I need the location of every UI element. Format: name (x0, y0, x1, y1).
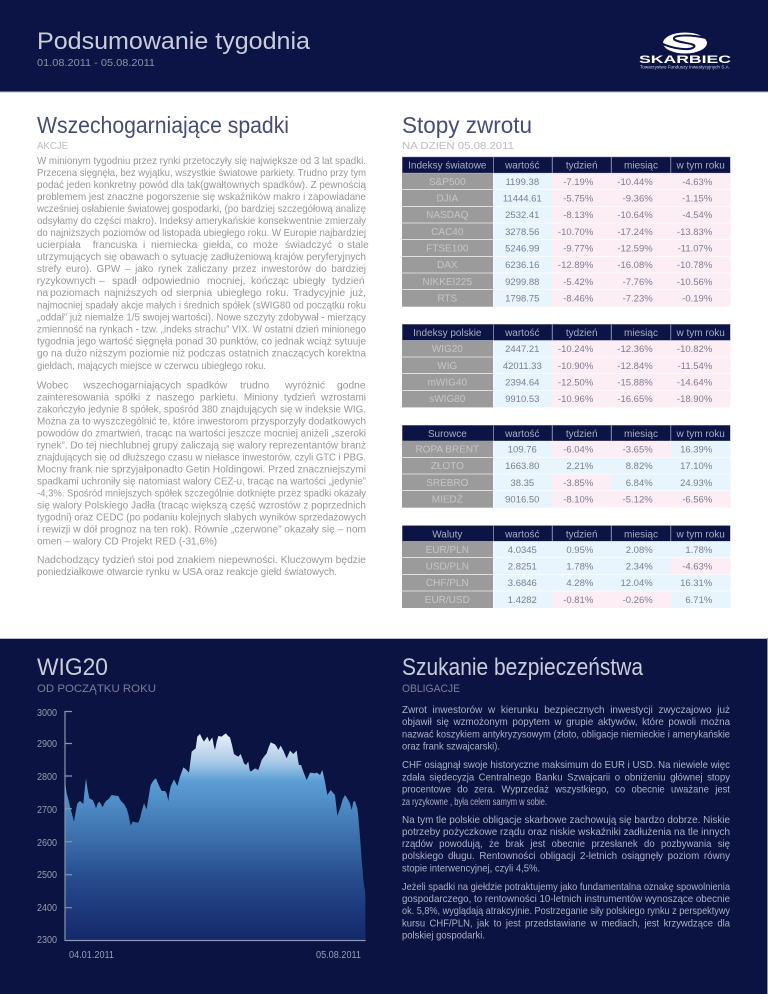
table: surowce: -6.56% (682, 494, 713, 506)
heading: Szukanie bezpieczeństwa: Szukanie bezpieczeństwa (402, 654, 644, 681)
text block: paragraph 1: Przecena sięgnęła, bez wyjątku, wszystkie światowe parkiety. Trudno przy tym (37, 168, 366, 179)
text block: paragraph 2: omen – walory CD Projekt RED (-31,6%) (37, 536, 217, 547)
table: waluty: -0.26% (623, 595, 653, 606)
table: indeksy polskie: mWIG40 (428, 378, 467, 388)
text block: paragraph 2: i rewizji w dół prognoz na ten rok). Równie „czerwone” okazały się – nom (37, 524, 366, 535)
table: indeksy światowe: 11444.61 (503, 194, 542, 204)
table: waluty: 1.78% (685, 545, 713, 556)
x-axis labels: 05.08.2011 (316, 950, 361, 961)
text block: paragraph 2: się walory Polskiego Jadła (tracąc większą część wzrostów z poprzednich (37, 500, 366, 511)
table: waluty: EUR/PLN (426, 545, 469, 556)
text block: paragraph 1: W minionym tygodniu przez rynki przetoczyły się największe od 3 lat spadki. (37, 156, 366, 167)
text block: paragraph 2: zakończyło jedynie 8 spółek, spośród 380 znajdujących się w indeksie WIG. (37, 404, 366, 415)
table: indeksy polskie: -16.65% (617, 394, 653, 405)
text block: paragraph 1: co (237, 240, 248, 251)
table: waluty: Waluty (432, 529, 462, 540)
text block: paragraph 1: spadł (112, 276, 137, 287)
table: waluty: 1.78% (566, 562, 594, 572)
axes (65, 712, 366, 940)
table: indeksy światowe: -7.19% (563, 177, 594, 188)
panel: stopy zwrotu (402, 112, 730, 608)
text block: paragraph 1: sierpnia (176, 288, 212, 299)
text block: paragraph 2: trudno (240, 380, 269, 391)
text block: paragraph 1: od (161, 288, 173, 299)
logo: Skarbiec (639, 32, 731, 70)
table: surowce: 9016.50 (505, 494, 539, 506)
table: surowce: -6.04% (563, 444, 594, 456)
text block: paragraph 3: polskiego długu. Rentowności obligacji 2-letnich osiągnęły poziom równy (402, 851, 731, 862)
text block: paragraph 3 (37, 555, 366, 578)
table: indeksy światowe: -17.24% (617, 227, 653, 238)
table: indeksy światowe: NASDAQ (426, 210, 469, 221)
table: indeksy światowe: -13.83% (677, 227, 713, 238)
table: indeksy światowe (402, 157, 730, 307)
text block: paragraph 1: najniższych (104, 288, 157, 299)
table: indeksy światowe: -7.23% (623, 294, 653, 304)
table: surowce (402, 425, 730, 508)
table: indeksy polskie: 2394.64 (505, 378, 539, 388)
y-axis labels: 3000 (37, 708, 57, 719)
table: indeksy światowe: -10.44% (617, 177, 653, 188)
table: indeksy światowe: wartość (504, 161, 540, 172)
table: indeksy światowe: -4.63% (682, 177, 713, 188)
table: indeksy światowe: -5.42% (563, 277, 594, 288)
area chart (37, 708, 366, 961)
table: waluty: EUR/USD (425, 595, 470, 606)
text block: paragraph 1: kończąc (251, 276, 289, 287)
text block: paragraph 1: – (99, 276, 105, 287)
table: indeksy światowe: RTS (437, 294, 458, 304)
table: indeksy światowe: w tym roku (676, 161, 725, 172)
table: surowce: -8.10% (563, 494, 594, 506)
text block: paragraph 2: CHF osiągnął swoje historyczne maksimum do EUR i USD. Na niewiele więc (402, 760, 730, 771)
table: indeksy światowe: -10.56% (677, 277, 713, 288)
text block: paragraph 1: najmocniej spadały akcje małych i średnich spółek (sWIG80 od początku roku (37, 300, 366, 311)
table: indeksy polskie: -12.50% (558, 378, 594, 388)
table: indeksy światowe: DJIA (436, 194, 458, 204)
table: indeksy polskie: tydzień (566, 328, 598, 339)
text block: paragraph 3 (402, 815, 731, 874)
table: indeksy polskie: -15.88% (617, 378, 653, 388)
text block: paragraph 2: powodów do zmartwień, tracąc na wartości jeszcze mocniej aniżeli „szeroki (37, 428, 366, 439)
text block: paragraph 2: znajdujących się od dłuższego czasu w niełasce inwestorów, czyli GTC i PBG. (37, 452, 366, 463)
y-axis labels: 2400 (37, 903, 57, 914)
text block: paragraph 1: utrzymujących się obawach o sytuację zadłużeniową krajów peryferyjnych (37, 252, 366, 263)
text block: paragraph 4: polskiej gospodarki. (402, 930, 485, 942)
table: indeksy światowe: tydzień (566, 161, 598, 172)
table: surowce: 109.76 (508, 444, 537, 456)
table: indeksy światowe: miesiąc (624, 161, 658, 172)
table: indeksy światowe: -5.75% (563, 194, 594, 204)
text block: paragraph 2: Mocny frank nie sprzyjałponadto Getin Holdingowi. Przed znaczniejszymi (37, 464, 366, 475)
table: waluty: w tym roku (676, 529, 725, 540)
table: indeksy polskie: -10.24% (558, 344, 594, 355)
table: waluty: 6.71% (685, 595, 713, 606)
text block: paragraph 1: odpowiednio (142, 276, 200, 287)
text block: paragraph 1: mocniej, (207, 276, 245, 287)
table: indeksy światowe: DAX (437, 260, 458, 271)
text block: paragraph 1: już, (349, 288, 366, 299)
panel: obligacje article (402, 654, 731, 942)
table: indeksy polskie: -10.96% (558, 394, 594, 405)
table: surowce: wartość (504, 429, 540, 440)
text block: paragraph 1: giełdach, mających miejsce w czerwcu ubiegłego roku. (37, 361, 266, 372)
text block: paragraph 1: poziomach (50, 288, 100, 299)
text block: paragraph 1: podać jeden konkretny powód dla tak(gwałtownych spadków). Z pewnością (37, 180, 366, 191)
date range: 01.08.2011 - 05.08.2011 (37, 57, 155, 69)
text block: paragraph 4 (402, 882, 731, 942)
table: indeksy światowe: -16.08% (617, 260, 653, 271)
text block: paragraph 1: o (338, 240, 344, 251)
text block: paragraph 3: stopie interwencyjnej, czyli 4,5%. (402, 864, 540, 874)
text block: paragraph 1 (402, 705, 730, 752)
table: indeksy światowe: 3278.56 (505, 227, 539, 238)
text block: paragraph 1: i (143, 240, 145, 251)
subheading: obligacje: OBLIGACJE (402, 683, 460, 695)
table: indeksy światowe: -4.54% (682, 210, 713, 221)
table: waluty: 4.0345 (508, 545, 537, 556)
table: surowce: tydzień (566, 429, 598, 440)
table: indeksy światowe: -10.78% (677, 260, 713, 271)
panel: akcje article (36, 112, 369, 578)
table: surowce: -5.12% (623, 494, 653, 506)
y-axis labels: 2300 (37, 935, 57, 946)
table: indeksy światowe: -12.89% (558, 260, 594, 271)
text block: paragraph 1: tydzień (332, 276, 365, 287)
text block: paragraph 1: odsyłamy do części makro). Indeksy amerykańskie konsekwentnie zmierzały (37, 216, 367, 227)
table: indeksy polskie: 42011.33 (503, 361, 542, 372)
table: indeksy światowe: -10.64% (617, 210, 653, 221)
table: surowce: 2.21% (566, 461, 594, 472)
table: waluty: 2.08% (626, 545, 653, 556)
text block: paragraph 4: Jeżeli spadki na giełdzie potraktujemy jako fundamentalna oznakę spowolnienia (402, 882, 730, 893)
text block: paragraph 2: spadkami uchroniły się natomiast walory CEZ-u, tracąc na wartości „jedynie” (37, 476, 367, 487)
table: indeksy światowe: Indeksy światowe (408, 161, 487, 172)
subheading: od początku roku: OD POCZĄTKU ROKU (37, 683, 156, 695)
table: surowce: -3.85% (563, 478, 594, 489)
table: surowce: 17.10% (680, 461, 713, 472)
text block: paragraph 2: Wobec (37, 380, 69, 391)
text block: paragraph 1: ubiegłego (217, 288, 262, 299)
table: surowce: 24.93% (680, 478, 713, 489)
table: waluty: -4.63% (682, 562, 713, 572)
text block: paragraph 2: rynek”. Do tej niechlubnej grupy zaliczają się walory reprezentantów branż (37, 440, 366, 451)
table: indeksy polskie: w tym roku (676, 328, 725, 339)
text block: paragraph 1: zmienność na rynkach - tzw. „indeks strachu” VIX. W ostatni dzień minionego (37, 324, 366, 335)
table: indeksy światowe: -10.70% (558, 227, 594, 238)
table: waluty: 12.04% (620, 578, 653, 589)
table: indeksy polskie (402, 324, 730, 407)
heading: Stopy zwrotu: Stopy zwrotu (402, 112, 532, 138)
table: indeksy światowe: 1199.38 (505, 177, 539, 188)
table: indeksy polskie: 9910.53 (505, 394, 539, 405)
table: indeksy polskie: -14.64% (677, 378, 713, 388)
text block: paragraph 1: niemiecka (151, 240, 198, 251)
y-axis labels: 2700 (37, 805, 57, 816)
table: waluty: CHF/PLN (426, 578, 469, 589)
table: waluty: 3.6846 (508, 578, 537, 589)
y-axis labels: 2800 (37, 772, 57, 783)
text block: paragraph 1: problemem jest znaczne pogorszenie się wskaźników makro i zapowiadane (37, 192, 366, 203)
text block: paragraph 1: stale (347, 240, 369, 251)
text block: paragraph 3: potrzeby pożyczkowe rządu oraz niskie wskaźniki zadłużenia na tle innych (402, 827, 730, 838)
table: indeksy światowe: -1.15% (682, 194, 713, 204)
text block: paragraph 1: na (37, 288, 48, 299)
table: indeksy światowe: NIKKEI225 (423, 277, 472, 288)
text block: paragraph 1: ucierpiała (37, 240, 81, 251)
text block: paragraph 1: ubiegły (293, 276, 326, 287)
text block: paragraph 2: zdała siędecyzja Centralnego Banku Szwajcarii o obniżeniu głównej stopy (402, 772, 731, 784)
table: surowce: Surowce (428, 429, 467, 440)
table: indeksy światowe: -9.77% (563, 244, 594, 254)
logo: Skarbiec: SKARBIEC (639, 54, 731, 66)
title: Podsumowanie tygodnia (37, 28, 311, 55)
text block: paragraph 1: tygodnia jego wartość sięgnęła ponad 30 punktów, co jednak wciąż sytuuje (37, 336, 366, 347)
table: waluty: 4.28% (566, 578, 594, 589)
text block: paragraph 2: -4,3%. Spośród mniejszych spółek szczególnie dotknięte przez spadki okazały (37, 488, 367, 499)
table: surowce: SREBRO (426, 478, 469, 489)
subheading: akcje: AKCJE (37, 140, 68, 152)
table: surowce: w tym roku (676, 429, 725, 440)
y-axis labels: 2900 (37, 739, 57, 750)
text block: paragraph 1: objawił się wzmożonym popytem w grupie aktywów, które powoli można (402, 717, 730, 728)
x-axis labels (69, 950, 361, 961)
logo: Skarbiec: Towarzystwo Funduszy Inwestycyjnych S.A. (640, 64, 730, 70)
text block: paragraph 3: rządów powodują, że brak jest obecnie przesłanek do pozbywania się (402, 839, 730, 850)
table: surowce: 16.39% (680, 444, 713, 456)
text block: paragraph 1: strefy euro). GPW – jako rynek zaliczany przez inwestorów do bardziej (37, 264, 366, 275)
table: indeksy światowe: -12.59% (617, 244, 653, 254)
table: waluty: USD/PLN (426, 562, 469, 572)
table: indeksy polskie: -12.36% (617, 344, 653, 355)
table: waluty: tydzień (566, 529, 598, 540)
table: surowce: -3.65% (623, 444, 653, 456)
table: indeksy polskie: -10.82% (677, 344, 713, 355)
text block: paragraph 1: ryzykownych (37, 276, 96, 287)
table: waluty (402, 525, 730, 608)
table: surowce: 8.82% (626, 461, 653, 472)
text block: paragraph 1: wcześniej osłabienie światowej gospodarki, (po bardziej szczegółową analizę (36, 204, 366, 215)
panel: WIG20 chart section (37, 654, 366, 961)
table: indeksy światowe: 1798.75 (505, 294, 539, 304)
y-axis labels (37, 708, 57, 946)
table: indeksy światowe: 5246.99 (505, 244, 539, 254)
table: waluty: 2.34% (626, 562, 653, 572)
table: surowce: miesiąc (624, 429, 658, 440)
text block: paragraph 1: świadczyć (285, 240, 332, 251)
text block: paragraph 1: Zwrot inwestorów w kierunku bezpiecznych inwestycji zwyczajowo już (402, 705, 730, 716)
table: indeksy polskie: -10.90% (558, 361, 594, 372)
subheading: date: NA DZIEŃ 05.08.2011 (402, 139, 514, 152)
table: waluty: wartość (504, 529, 540, 540)
table: waluty: -0.81% (563, 595, 594, 606)
table: indeksy światowe: 6236.16 (505, 260, 539, 271)
table: surowce: MIEDŹ (432, 492, 463, 506)
table: surowce: 1663.80 (505, 461, 539, 472)
table: indeksy polskie: -11.54% (678, 361, 713, 372)
table: indeksy polskie: 2447.21 (505, 344, 539, 355)
text block: paragraph 4: ok. 5,8%, wyglądają atrakcyjnie. Postrzeganie siły polskiego rynku z perspektywy (402, 906, 731, 917)
table: indeksy polskie: sWIG80 (429, 394, 466, 405)
text block: paragraph 2: za ryzykowne , była celem samym w sobie. (402, 797, 547, 808)
text block: paragraph 3: poniedziałkowe otwarcie rynku w USA oraz reakcje giełd światowych. (37, 567, 337, 578)
text block: paragraph 2 (402, 760, 731, 808)
text block: paragraph 1: Tradycyjnie (293, 288, 346, 299)
text block: paragraph 2: zainteresowania spółki z naszego parkietu. Miniony tydzień wzrostami (37, 392, 366, 403)
text block: paragraph 4: kursu CHF/PLN, jak to jest przedstawiane w mediach, jest krzywdzące dla (402, 918, 730, 930)
text block: paragraph 4: gospodarczego, to rentowności 10-letnich instrumentów wynoszące obecnie (402, 894, 730, 905)
table: indeksy polskie: WIG (437, 361, 458, 372)
text block: paragraph 2: tygodni) oraz CEDC (po podaniu kolejnych słabych wyników sprzedażowych (37, 512, 366, 523)
table: indeksy światowe: -9.36% (623, 194, 653, 204)
text block: paragraph 2: wszechogarniających (82, 380, 181, 391)
table: surowce: 38.35 (510, 478, 534, 489)
text block: paragraph 1: do najniższych poziomów od listopada ubiegłego roku. W Europie najbardziej (37, 228, 366, 239)
y-axis labels: 2500 (37, 870, 57, 881)
heading: Wszechogarniające spadki: Wszechogarniające spadki (37, 112, 289, 138)
heading: WIG20: WIG20 (37, 654, 108, 681)
text block: paragraph 2: Można za to wyszczególnić te, które inwestorom przysporzyły dodatkowych (37, 416, 366, 427)
table: waluty: 16.31% (680, 578, 713, 589)
table: indeksy światowe: -8.46% (563, 294, 594, 304)
table: indeksy światowe: -11.07% (678, 244, 713, 254)
text block: paragraph 1: francuska (93, 240, 138, 251)
text block: paragraph 3: Nadchodzący tydzień stoi pod znakiem niepewności. Kluczowym będzie (37, 555, 366, 566)
header band (0, 0, 768, 92)
table: indeksy światowe: S&P500 (429, 177, 466, 188)
table: waluty: 0.95% (566, 545, 594, 556)
table: indeksy światowe: CAC40 (431, 227, 464, 238)
y-axis labels: 2600 (37, 838, 57, 849)
table: indeksy światowe: -0.19% (682, 294, 713, 304)
text block: paragraph 2 (37, 380, 367, 547)
text block: paragraph 2: procentowe do zera. Wyprzedaż wszystkiego, co obecnie uważane jest (402, 784, 730, 796)
text block: paragraph 1: giełda, (203, 240, 233, 251)
table: indeksy światowe: 9299.88 (505, 277, 539, 288)
table: surowce: 6.84% (626, 478, 653, 489)
bottom navy band (0, 638, 768, 994)
table: waluty: miesiąc (624, 529, 658, 540)
text block: paragraph 2: wyróżnić (284, 380, 325, 391)
text block: paragraph 2: spadków (187, 380, 228, 391)
table: waluty: 1.4282 (508, 595, 537, 606)
table: indeksy światowe: FTSE100 (426, 244, 469, 254)
text block: paragraph 2: godne (337, 380, 366, 391)
table: indeksy polskie: -12.84% (617, 361, 653, 372)
text block: paragraph 1: go na dużo niższym poziomie niż podczas ostatnich znaczących korektna (37, 348, 366, 359)
table: surowce: ROPA BRENT (415, 444, 479, 456)
table: waluty: 2.8251 (508, 562, 537, 572)
table: indeksy polskie: miesiąc (624, 328, 658, 339)
table: indeksy światowe: -7.76% (623, 277, 653, 288)
table: indeksy światowe: 2532.41 (505, 210, 539, 221)
text block: paragraph 1: roku. (266, 288, 289, 299)
x-axis labels: 04.01.2011 (69, 950, 114, 961)
text block: paragraph 1: nazwać koszykiem antykryzysowym (złoto, obligacje niemieckie i amerykańskie (402, 730, 730, 740)
table: indeksy światowe: -8.13% (563, 210, 594, 221)
table: surowce: ZŁOTO (431, 461, 464, 472)
text block: paragraph 1: oraz frank szwajcarski). (402, 742, 500, 752)
text block: paragraph 3: Na tym tle polskie obligacje skarbowe zachowują się bardzo dobrze. Niskie (402, 815, 730, 826)
text block: paragraph 1: „oddał” już niemalże 1/5 swojej wartości). Nowe szczyty zdobywał - mierzący (37, 312, 367, 323)
table: indeksy polskie: Indeksy polskie (413, 328, 482, 339)
table: indeksy polskie: wartość (504, 328, 540, 339)
text block: paragraph 1: może (253, 240, 278, 251)
table: indeksy polskie: -18.90% (677, 394, 713, 405)
text block: paragraph 1 (36, 156, 369, 372)
table: indeksy polskie: WIG20 (432, 344, 463, 355)
